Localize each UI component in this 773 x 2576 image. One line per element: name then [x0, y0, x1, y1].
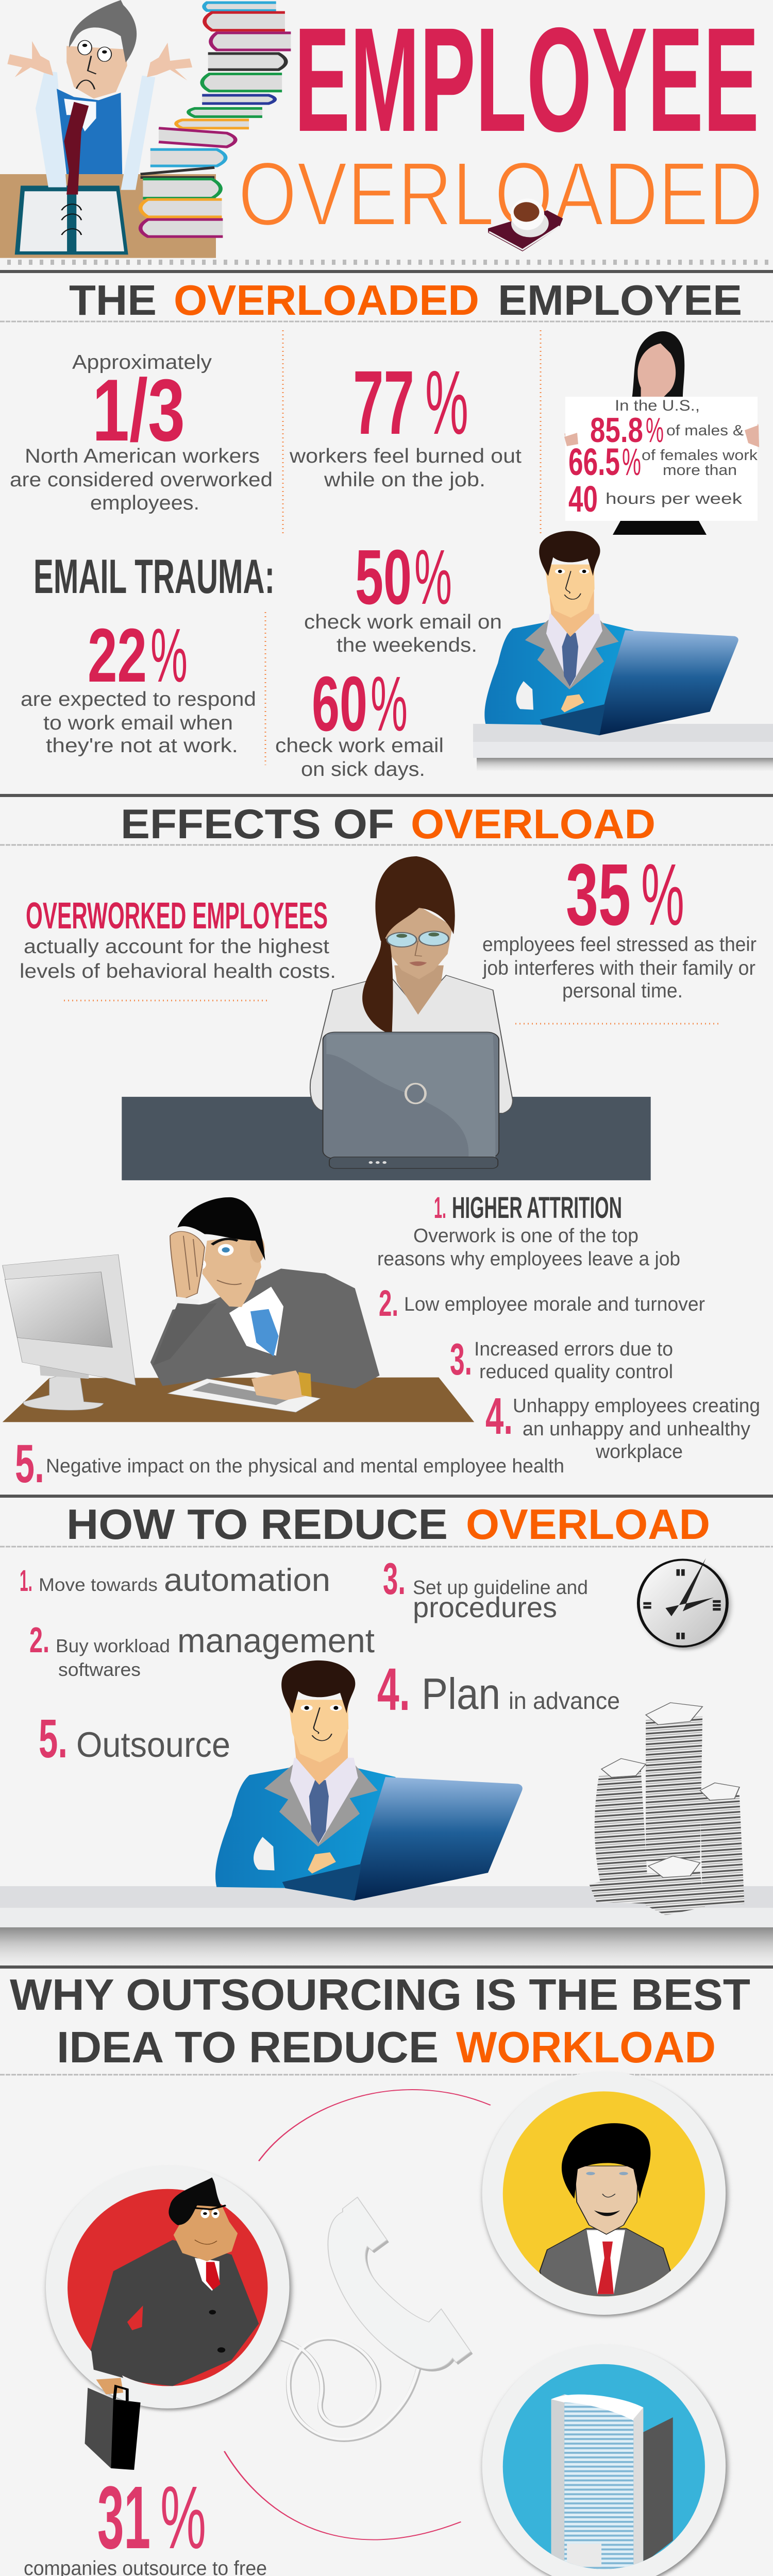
stat: 77 percent [289, 352, 522, 491]
tip 2: management [177, 1621, 375, 1659]
tip 5: 5. [39, 1708, 68, 1769]
stat: one third [10, 351, 273, 514]
stat: woman with 40 hours card: 40 [568, 479, 598, 520]
item 3: reduced quality control [479, 1361, 673, 1383]
heading [66, 1500, 710, 1548]
stat: 35 percent: personal time. [562, 980, 683, 1002]
item 4 [485, 1387, 760, 1463]
item 4: an unhappy and unhealthy [523, 1418, 750, 1440]
stat: 22 percent [21, 613, 256, 757]
panel: how to reduce overload [0, 1500, 773, 1965]
divider: tick band [7, 260, 773, 265]
icon: telephone handset [281, 2197, 473, 2440]
desk [0, 1886, 773, 1965]
tip 5 [39, 1708, 230, 1769]
tip 4: Plan [422, 1670, 500, 1719]
stat: woman with 40 hours card: 66.5 [568, 440, 620, 483]
stat: 35 percent: job interferes with their family or [482, 957, 755, 979]
panel: why outsourcing [0, 1971, 773, 2576]
stat: woman with 40 hours card: % [646, 411, 664, 450]
heading: OVERLOADED [174, 276, 479, 324]
item 5: 5. [15, 1434, 44, 1494]
heading: WHY OUTSOURCING IS THE BEST [10, 1971, 750, 2020]
tip 1: automation [164, 1563, 330, 1598]
stat: 31 percent [24, 2467, 267, 2576]
heading: email trauma: EMAIL TRAUMA: [33, 549, 275, 603]
illustration: paper stacks [589, 1703, 744, 1916]
text: overworked employees: levels of behavioral health costs. [20, 960, 336, 982]
text: overworked employees: actually account for the highest [24, 936, 329, 958]
item 3: 3. [450, 1335, 472, 1384]
tip 1: Move towards [39, 1575, 158, 1595]
stat: 50 percent: % [414, 533, 452, 620]
stat: 22 percent: to work email when [43, 712, 233, 734]
stat: 60 percent: check work email [275, 735, 444, 757]
stat: 60 percent [275, 660, 444, 781]
tip 3: Set up guideline and [413, 1577, 588, 1599]
stat: one third: 1/3 [92, 361, 185, 460]
text: overworked employees [20, 895, 336, 982]
text: overworked employees: OVERWORKED EMPLOYEES [26, 895, 328, 937]
circle: yellow businessman [482, 2072, 728, 2316]
item 1 [377, 1191, 680, 1270]
stat: 35 percent: employees feel stressed as their [482, 934, 757, 956]
icon: clock [638, 1558, 731, 1650]
stat: woman with 40 hours card: more than [663, 462, 737, 479]
panel: effects of overload [0, 801, 773, 1494]
tip 3: procedures [413, 1591, 557, 1623]
stat: 60 percent: 60 [312, 660, 367, 747]
stat: 77 percent: % [425, 352, 468, 453]
illustration: stressed man at desk [0, 0, 216, 258]
panel: header [0, 0, 773, 262]
stat: 28 percent [301, 2568, 508, 2576]
stat: 22 percent: are expected to respond [21, 688, 256, 710]
stat: 31 percent: 31 [97, 2467, 150, 2567]
stat: one third: employees. [90, 492, 199, 514]
item 2 [379, 1283, 705, 1324]
heading: HOW TO REDUCE [66, 1500, 448, 1548]
tip 2: Buy workload [56, 1635, 170, 1656]
item 2: 2. [379, 1283, 398, 1324]
illustration: man at laptop [215, 1660, 523, 1901]
stat: woman with 40 hours card: of males & [666, 422, 744, 439]
item 1: reasons why employees leave a job [377, 1248, 680, 1270]
heading: WORKLOAD [456, 2023, 716, 2072]
item 5: Negative impact on the physical and mental employee health [46, 1455, 564, 1477]
heading: OVERLOAD [466, 1500, 710, 1548]
circle: building [482, 2344, 728, 2576]
item 5 [15, 1434, 564, 1494]
tip 4: 4. [377, 1656, 410, 1723]
tip 2 [29, 1620, 375, 1680]
item 4: workplace [595, 1441, 683, 1463]
tip 1 [20, 1563, 330, 1598]
illustration: stack of books [141, 3, 291, 236]
tip 3 [383, 1554, 588, 1623]
tip 2: softwares [58, 1659, 141, 1680]
stat: 60 percent: % [371, 660, 408, 747]
stat: woman with 40 hours card: 85.8 [590, 411, 643, 450]
item 1: 1. [434, 1191, 446, 1225]
item 3 [450, 1335, 673, 1384]
illustration: tired man at computer [3, 1197, 474, 1422]
tip 3: 3. [383, 1554, 406, 1604]
stat: 77 percent: while on the job. [324, 469, 485, 491]
tip 2: 2. [29, 1620, 49, 1660]
item 1: HIGHER ATTRITION [452, 1191, 622, 1225]
tip 4 [377, 1656, 620, 1723]
heading: EFFECTS OF [121, 801, 394, 848]
tip 1: 1. [20, 1564, 32, 1598]
arc connectors [224, 2090, 491, 2540]
stat: 60 percent: on sick days. [301, 758, 425, 781]
stat: 77 percent: 77 [353, 352, 414, 453]
stat: 50 percent: check work email on [304, 611, 502, 633]
illustration: man at laptop on desk [473, 531, 773, 771]
item 2: Low employee morale and turnover [404, 1294, 705, 1315]
item 3: Increased errors due to [474, 1338, 673, 1360]
stat: one third: Approximately [72, 351, 212, 374]
stat: one third: North American workers [25, 445, 260, 467]
heading: THE [69, 276, 157, 324]
stat: 22 percent: % [150, 613, 188, 698]
heading: OVERLOAD [411, 801, 656, 848]
item 1: Overwork is one of the top [413, 1225, 638, 1247]
stat: 31 percent: % [160, 2467, 206, 2567]
diagram: outsourcing circles [46, 2072, 728, 2576]
stat: 35 percent: % [641, 846, 684, 944]
stat: 35 percent: 35 [566, 846, 631, 944]
stat: 35 percent [482, 846, 757, 1002]
heading: IDEA TO REDUCE [57, 2023, 439, 2072]
item 4: Unhappy employees creating [513, 1395, 760, 1417]
heading [69, 276, 742, 324]
circle: fat businessman with briefcase [46, 2165, 291, 2470]
stat: woman with 40 hours card: % [622, 440, 641, 483]
stat: woman with 40 hours card: of females work [642, 447, 758, 464]
stat: 50 percent: 50 [355, 533, 412, 620]
stat: one third: are considered overworked [10, 469, 273, 491]
panel: the overloaded employee [0, 276, 773, 781]
stat: woman with 40 hours card: hours per week [606, 489, 743, 507]
icon: coffee cup on book [488, 198, 563, 251]
heading: EMPLOYEE [498, 276, 742, 324]
stat: 50 percent: the weekends. [337, 634, 477, 656]
tip 4: in advance [509, 1687, 620, 1714]
stat: woman with 40 hours card [564, 331, 759, 535]
stat: 50 percent [304, 533, 502, 656]
stat: 77 percent: workers feel burned out [289, 445, 522, 467]
heading [121, 801, 656, 848]
item 4: 4. [485, 1387, 513, 1445]
heading [10, 1971, 750, 2072]
list: effects [15, 1191, 760, 1494]
stat: woman with 40 hours card: In the U.S., [615, 397, 700, 414]
stat: 22 percent: 22 [88, 613, 147, 698]
illustration: woman at laptop [122, 856, 651, 1180]
icon: woman figure [564, 331, 759, 447]
tip 5: Outsource [76, 1725, 230, 1765]
stat: 22 percent: they're not at work. [46, 735, 238, 757]
